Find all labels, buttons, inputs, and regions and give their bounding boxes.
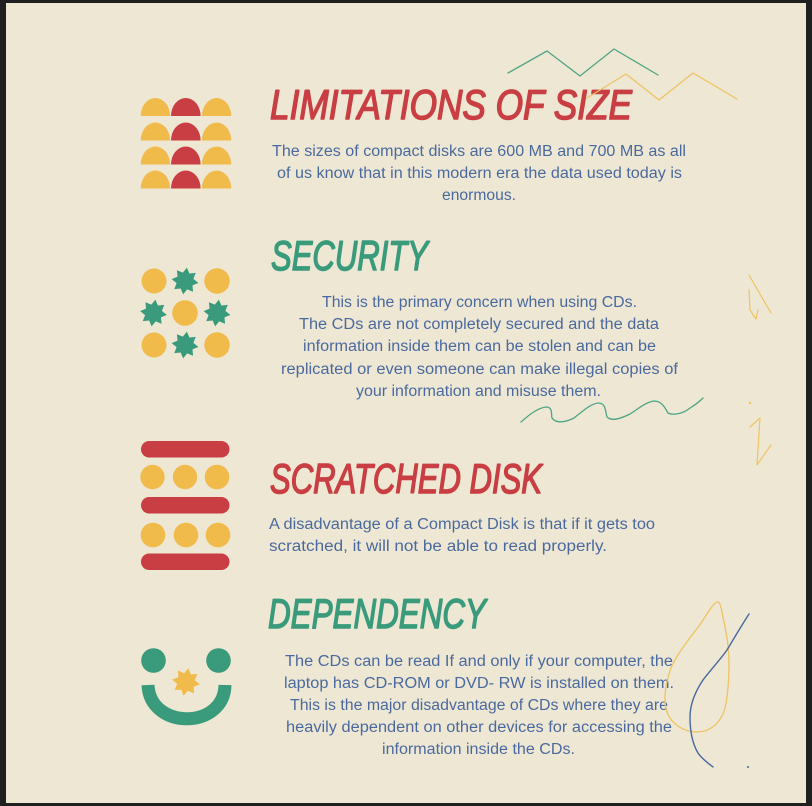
doodle: yellow tick upper right [749,290,758,319]
panel: limitations of size [141,81,686,204]
text: security body [281,294,679,400]
text: scratched disk body: A disadvantage of a Compact Disk is that if it gets too [269,516,655,533]
text: security body: This is the primary concern when using CDs. [322,294,637,311]
panel: security [138,232,679,400]
text: security body: replicated or even someone can make illegal copies of [281,361,679,378]
icon: bars and dots [140,441,230,570]
text: security body: your information and misuse them. [356,383,601,400]
heading: dependency: DEPENDENCY [268,590,488,637]
text: dependency body: heavily dependent on other devices for accessing the [286,719,672,736]
text: limitations body: of us know that in this modern era the data used today is [277,165,682,182]
text: dependency body: The CDs can be read If and only if your computer, the [285,653,673,670]
doodle: green wave [521,398,703,422]
heading: scratched disk: SCRATCHED DISK [270,455,543,502]
text: dependency body [284,653,674,758]
text: security body: The CDs are not completely secured and the data [299,316,659,333]
text: dependency body: laptop has CD-ROM or DVD- RW is installed on them. [284,675,674,692]
doodle: yellow zigzag [587,73,737,100]
text: scratched disk body [269,516,655,555]
heading: security: SECURITY [271,232,430,279]
doodle: yellow scribble lower right [750,418,771,465]
text: scratched disk body: scratched, it will not be able to read properly. [269,538,607,555]
icon: smiling face [141,648,231,719]
text: security body: information inside them can be stolen and can be [303,338,656,355]
doodle: yellow dot right [749,402,751,404]
panel: scratched disk [140,441,655,570]
doodle: green zigzag [508,49,658,76]
text: limitations body [272,143,686,204]
text: limitations body: enormous. [442,187,516,204]
text: dependency body: This is the major disadvantage of CDs where they are [290,697,668,714]
text: dependency body: information inside the CDs. [382,741,575,758]
icon: rows of semicircles [141,98,231,188]
doodle: yellow drop outline [665,602,729,732]
doodle: blue dot [747,766,749,768]
icon: circles and stars grid [138,266,232,360]
panel: dependency [141,590,674,758]
doodle: blue curved line [690,614,749,767]
heading: limitations of size: LIMITATIONS OF SIZE [270,81,633,128]
text: limitations body: The sizes of compact disks are 600 MB and 700 MB as all [272,143,686,160]
doodle: yellow scribble upper right [749,275,771,313]
